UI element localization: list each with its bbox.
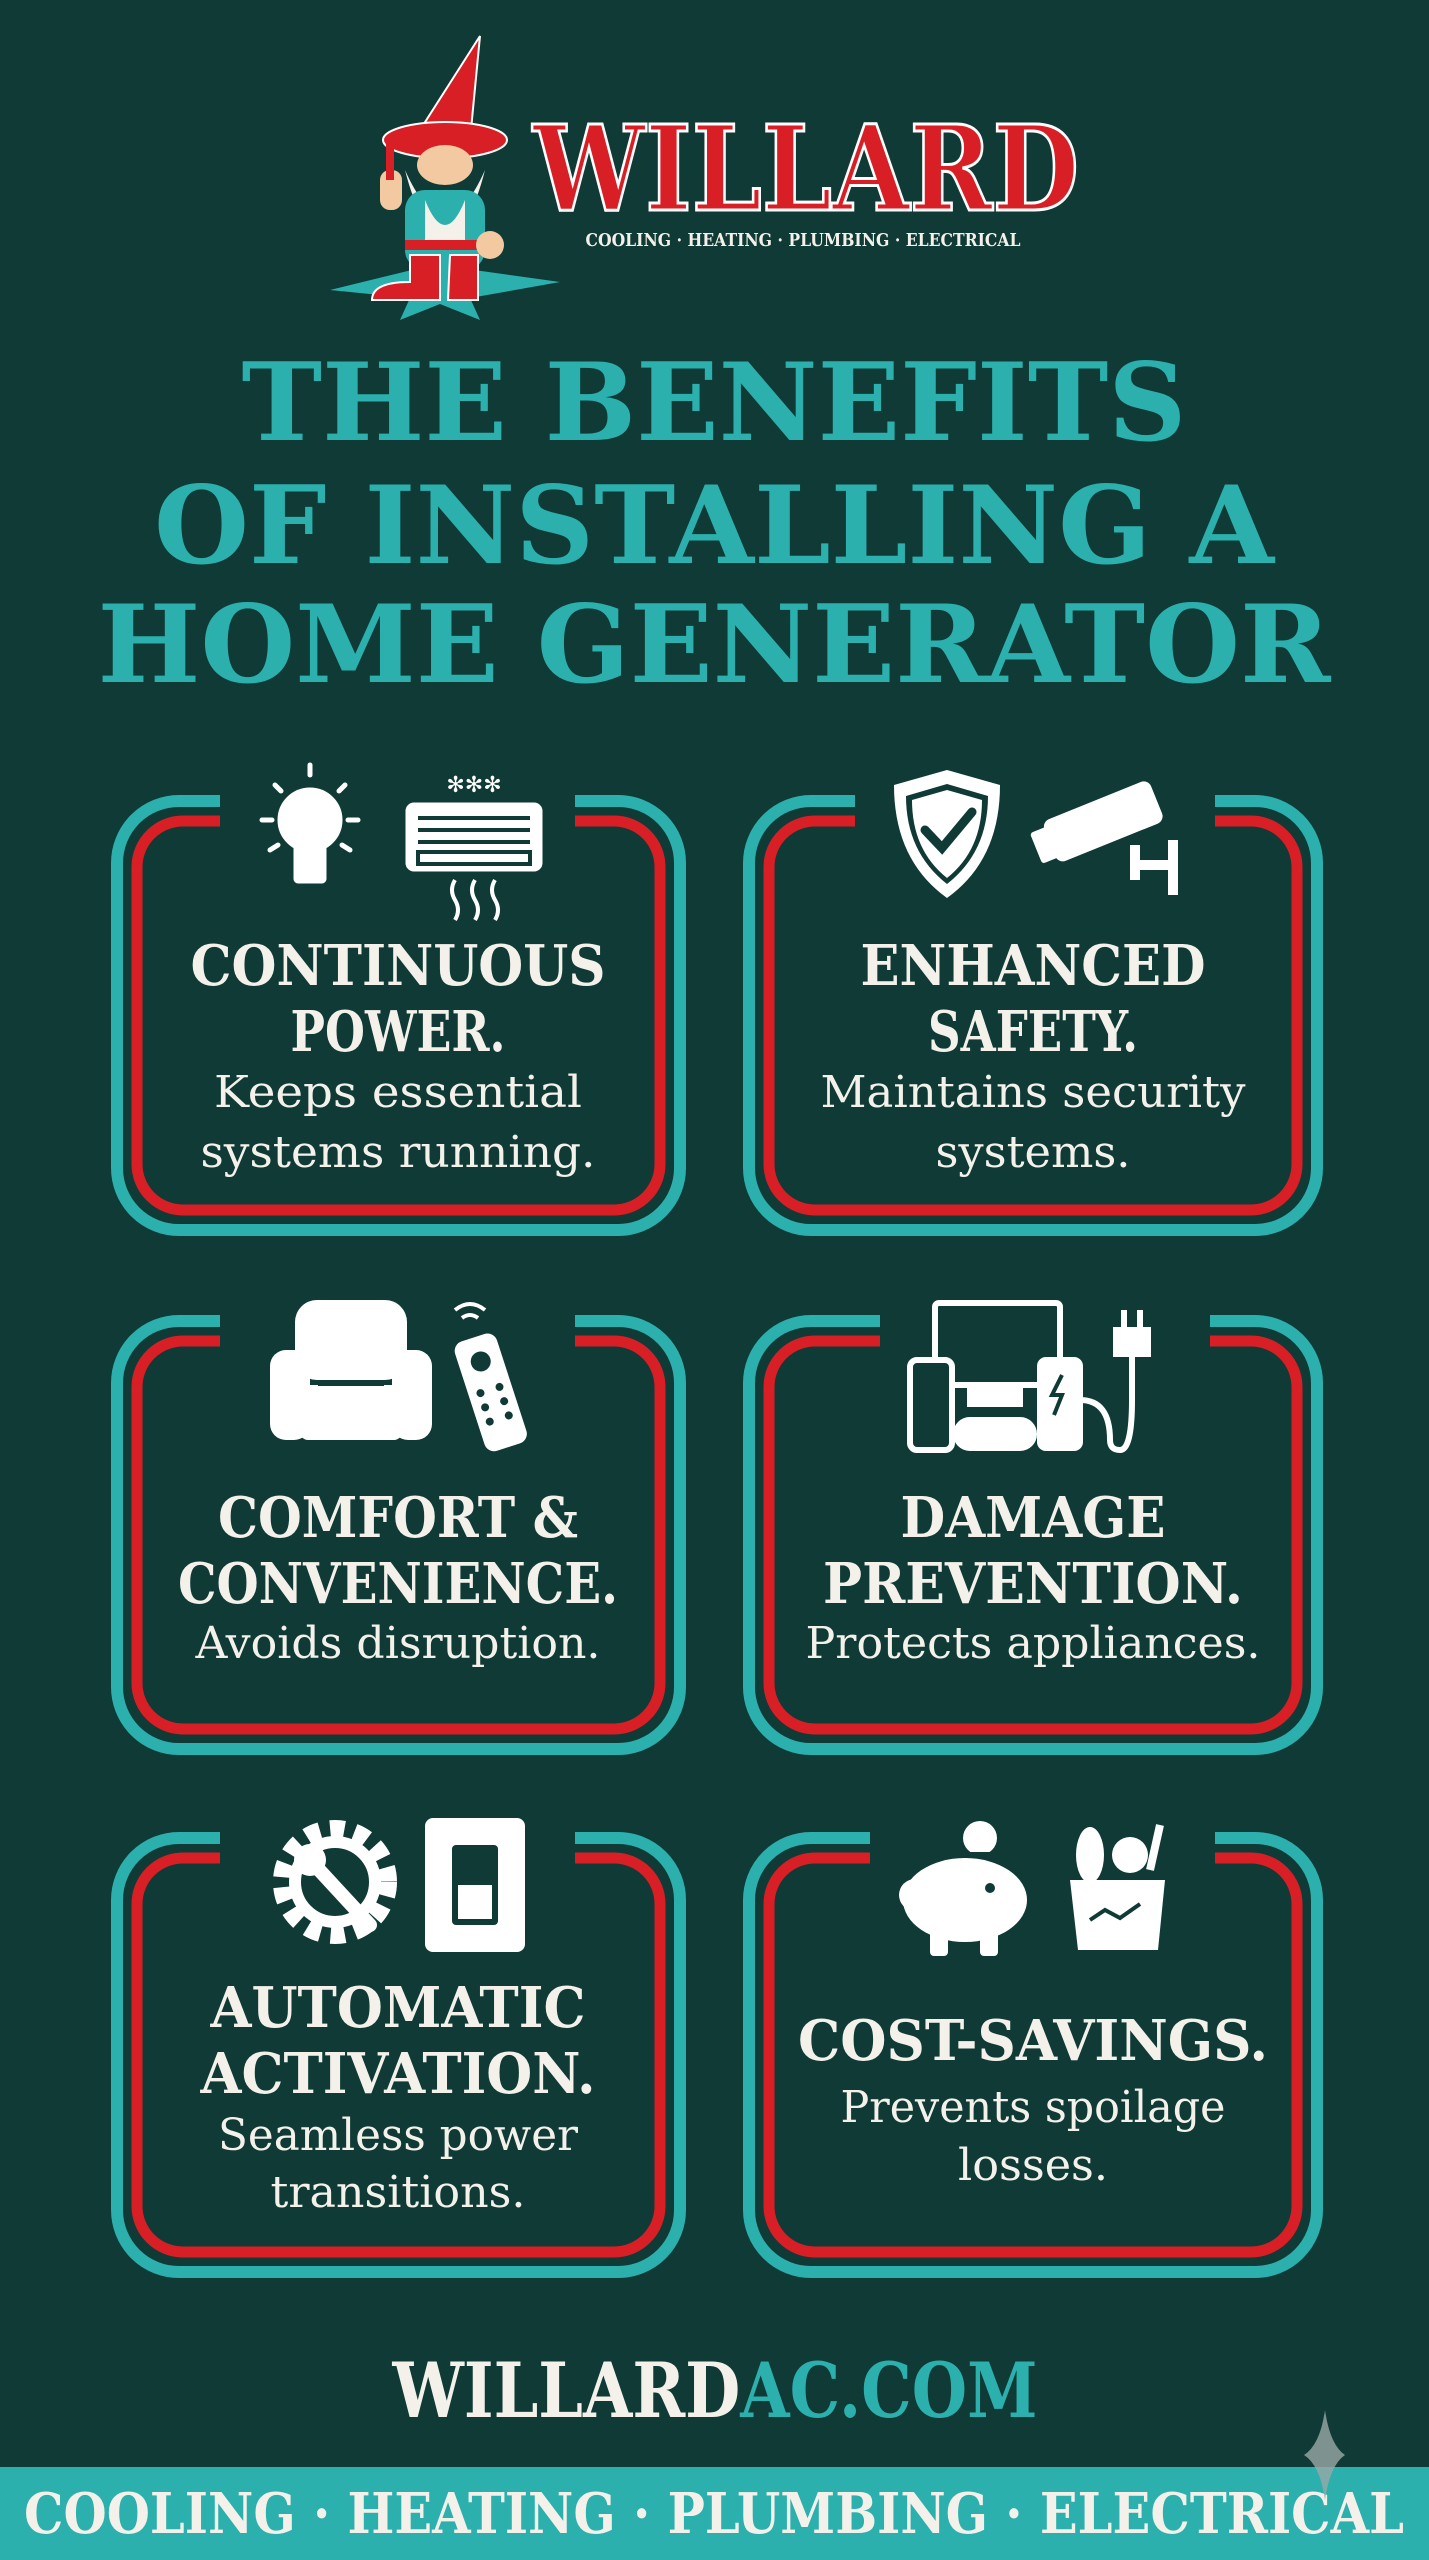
text: comfort [178, 1485, 618, 1669]
text: continuous power: CONTINUOUS [190, 933, 606, 999]
text: continuous power [190, 933, 606, 1178]
icon: piggy bank and groceries [899, 1821, 1165, 1956]
text: enhanced safety [820, 933, 1246, 1178]
text: damage prevention: DAMAGE [900, 1485, 1166, 1551]
icon: armchair and remote [270, 1300, 529, 1454]
text: automatic activation [200, 1975, 596, 2218]
panel: comfort and convenience [117, 1300, 680, 1749]
icon: gear wrench and switch [283, 1818, 525, 1952]
panel: continuous power [117, 765, 680, 1230]
text: damage prevention: PREVENTION. [823, 1551, 1243, 1617]
text: enhanced safety: systems. [936, 1127, 1130, 1178]
title: HOME GENERATOR [98, 582, 1332, 708]
title [98, 340, 1332, 708]
panel: cost savings [749, 1815, 1317, 2272]
title: OF INSTALLING A [154, 463, 1276, 589]
panel: enhanced safety [749, 770, 1317, 1230]
text: comfort: CONVENIENCE. [178, 1551, 618, 1617]
text: cost savings [798, 2008, 1268, 2191]
text: automatic activation: ACTIVATION. [200, 2041, 596, 2107]
icon: light bulb and AC [262, 765, 542, 920]
website url: WILLARDAC.COM [392, 2346, 1037, 2435]
logo wordmark: WILLARD [531, 99, 1079, 238]
text: damage prevention: Protects appliances. [806, 1618, 1260, 1669]
panel: damage prevention [749, 1300, 1317, 1749]
text: cost savings: Prevents spoilage [840, 2082, 1226, 2133]
icon: gnome mascot [330, 36, 560, 320]
logo [330, 36, 1079, 320]
text: automatic activation: transitions. [270, 2167, 526, 2218]
icon: sparkle [1304, 2410, 1345, 2500]
title: THE BENEFITS [242, 340, 1186, 466]
panel: automatic activation [117, 1815, 680, 2272]
icon: light bulb and AC: ✻✻✻ [446, 773, 502, 798]
icon: devices and plug [910, 1303, 1148, 1450]
footer bar [0, 2467, 1429, 2560]
text: enhanced safety: SAFETY. [928, 999, 1138, 1065]
text: continuous power: Keeps essential [214, 1067, 582, 1118]
text: cost savings: losses. [958, 2140, 1108, 2191]
text: damage prevention [806, 1485, 1260, 1669]
text: comfort: COMFORT & [218, 1485, 578, 1551]
text: continuous power: POWER. [290, 999, 506, 1065]
text: automatic activation: Seamless power [218, 2110, 579, 2161]
icon: shield and camera [894, 770, 1178, 898]
text: automatic activation: AUTOMATIC [210, 1975, 585, 2041]
text: cost savings: COST-SAVINGS. [798, 2008, 1268, 2074]
logo tagline: COOLING · HEATING · PLUMBING · ELECTRICAL [586, 230, 1021, 251]
text: comfort: Avoids disruption. [194, 1618, 600, 1669]
text: continuous power: systems running. [200, 1127, 596, 1178]
text: enhanced safety: Maintains security [820, 1067, 1246, 1118]
text: enhanced safety: ENHANCED [860, 933, 1206, 999]
